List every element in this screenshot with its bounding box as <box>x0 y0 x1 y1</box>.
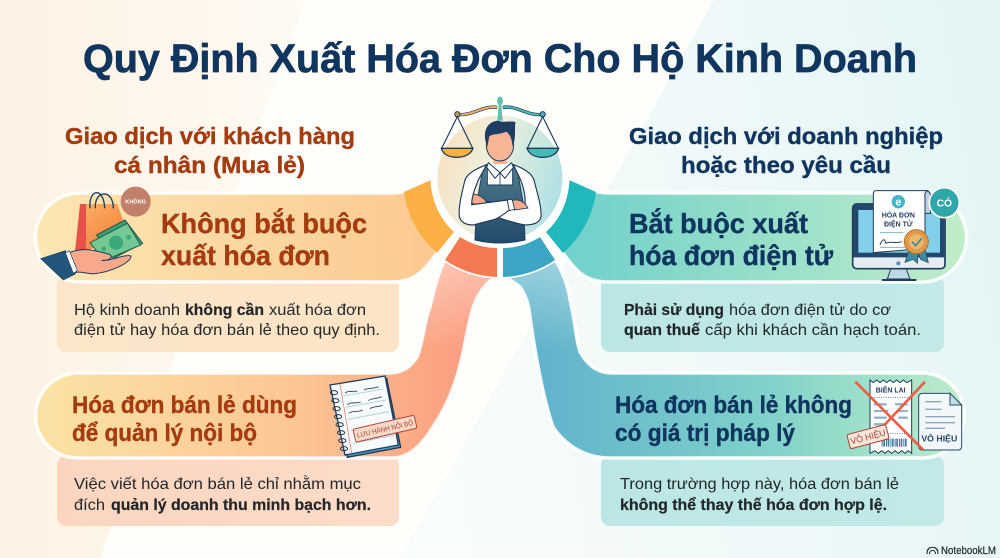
icon: monitor with electronic invoice: HÓA ĐƠN <box>882 210 915 219</box>
panel: no invoice required: Không bắt buộc <box>161 208 367 239</box>
body box: upper right <box>601 276 944 352</box>
heading: left column: cá nhân (Mua lẻ) <box>114 152 305 178</box>
body box: upper left: xuất hóa đơn <box>269 302 366 319</box>
heading: right column: hoặc theo yêu cầu <box>681 152 891 178</box>
icon: voided receipt and document: VÔ HIỆU <box>849 427 887 446</box>
panel: retail invoice for internal management <box>36 237 497 458</box>
heading: right column: Giao dịch với doanh nghiệp <box>629 123 943 149</box>
icon: monitor with electronic invoice: CÓ <box>937 196 952 209</box>
heading: left column: Giao dịch với khách hàng <box>65 123 355 149</box>
body box: lower right <box>601 456 944 526</box>
body box: upper left: Hộ kinh doanh <box>74 302 180 319</box>
panel: retail invoice for internal management: để quản lý nội bộ <box>72 420 257 447</box>
body box: upper right: quan thuế <box>624 322 700 339</box>
person: torso and crossed arms <box>459 163 541 243</box>
panel: electronic invoice required: Bắt buộc xuất <box>629 208 808 239</box>
panel: retail invoice for internal management: Hóa đơn bán lẻ dùng <box>72 392 297 419</box>
heading: right column <box>629 123 943 178</box>
heading: left column <box>65 123 355 178</box>
body box: upper right: cấp khi khách cần hạch toán. <box>705 322 921 339</box>
panel: no invoice required <box>36 180 454 282</box>
panel: electronic invoice required: hóa đơn điện tử <box>629 240 834 271</box>
panel: no invoice required: xuất hóa đơn <box>161 240 330 271</box>
panel: retail invoice has no legal value <box>503 237 965 458</box>
central figure: shopkeeper with scales <box>434 96 566 244</box>
person: head <box>485 121 516 170</box>
body box: lower left <box>57 456 399 526</box>
body box: lower left: đích <box>74 497 105 514</box>
icon: monitor with electronic invoice: e <box>895 196 901 208</box>
circle backdrop <box>434 112 566 244</box>
body box: upper left <box>57 276 399 352</box>
icon: shopping bag, cash and hand: KHÔNG <box>125 198 147 206</box>
title: Quy Định Xuất Hóa Đơn Cho Hộ Kinh Doanh <box>83 37 917 81</box>
icon: monitor with electronic invoice: ĐIỆN TỬ <box>884 220 913 229</box>
body box: upper right: hóa đơn điện tử do cơ <box>729 302 892 319</box>
body box: lower right: Trong trường hợp này, hóa đơn bán lẻ <box>620 476 899 493</box>
icon: monitor with electronic invoice <box>853 188 959 281</box>
body box: upper left: điện tử hay hóa đơn bán lẻ theo quy định. <box>74 322 380 339</box>
body box: lower left: Việc viết hóa đơn bán lẻ chỉ nhằm mục <box>74 474 361 493</box>
icon: shopping bag, cash and hand <box>41 187 151 280</box>
icon: voided receipt and document: VÔ HIỆU <box>921 435 958 444</box>
panel: retail invoice has no legal value: có giá trị pháp lý <box>615 420 795 447</box>
body box: upper right: Phải sử dụng <box>624 302 724 319</box>
body box: lower left: quản lý doanh thu minh bạch hơn. <box>111 497 371 514</box>
icon: notebook with internal stamp <box>330 376 417 457</box>
scales <box>441 96 559 157</box>
icon: voided receipt and document <box>847 380 962 453</box>
panel: retail invoice has no legal value: Hóa đơn bán lẻ không <box>615 392 852 419</box>
icon: notebook with internal stamp: LƯU HÀNH NỘI BỘ <box>356 418 414 440</box>
panel: electronic invoice required <box>546 180 966 282</box>
body box: upper left: không cần <box>185 302 264 319</box>
body box: lower right: không thể thay thế hóa đơn hợp lệ. <box>620 496 887 514</box>
icon: voided receipt and document: BIÊN LAI <box>876 386 906 395</box>
